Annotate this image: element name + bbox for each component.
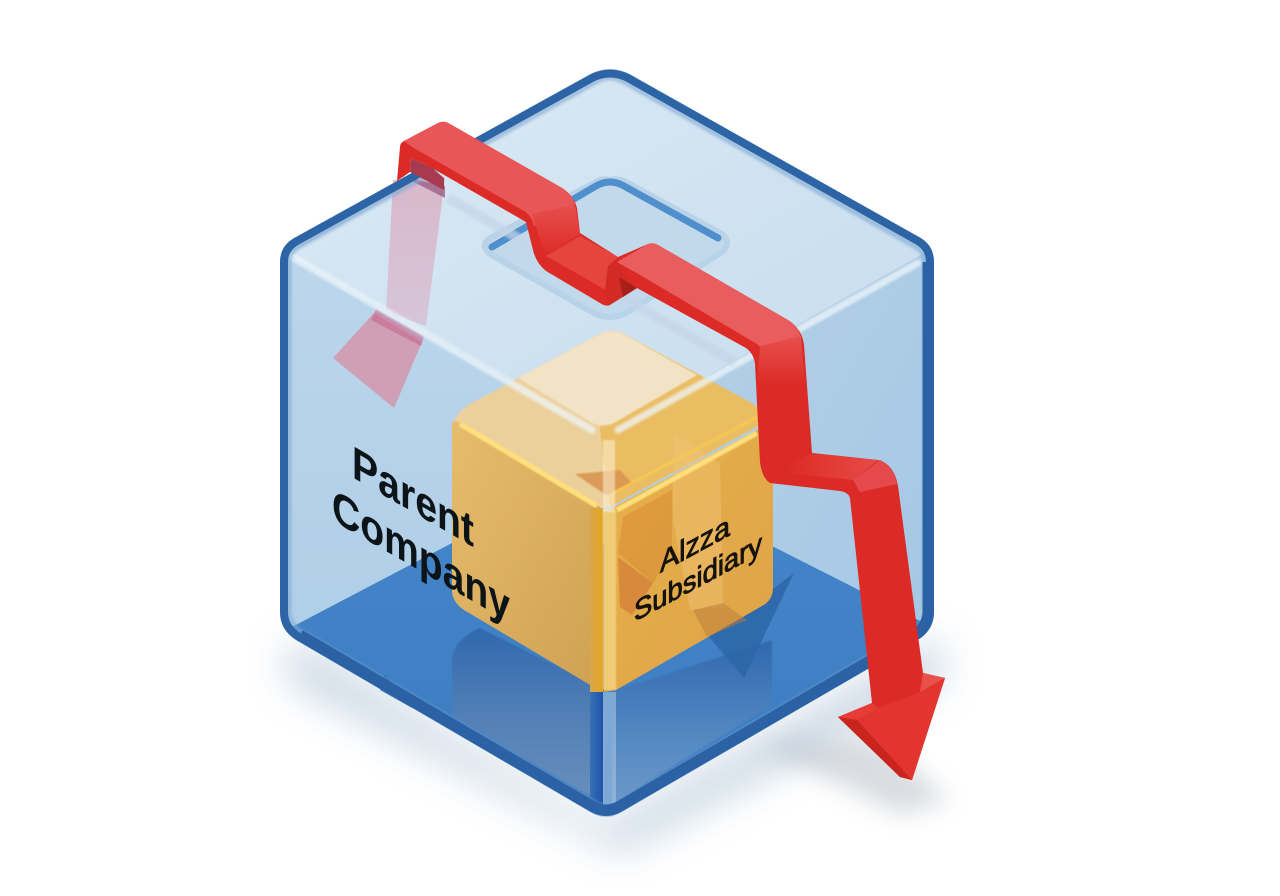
glass thick right and bottom edges xyxy=(300,262,928,810)
reflection of gold cube on floor: right xyxy=(612,640,772,804)
ground shadow xyxy=(290,640,950,850)
label: Alzza Subsidiary: Subsidiary xyxy=(634,526,762,629)
top glass face xyxy=(288,75,926,433)
glass floor xyxy=(290,543,930,814)
cube edge highlights xyxy=(460,424,757,510)
cube left face xyxy=(452,421,602,692)
glass cube: parent company xyxy=(280,69,934,817)
cube top face left half xyxy=(452,331,624,507)
translucent arrow shapes on cube right face xyxy=(618,433,747,637)
arrow head left bevel xyxy=(838,703,878,720)
glass silhouette xyxy=(280,69,934,817)
arrow ghost on floor xyxy=(709,573,794,678)
cube top face right half xyxy=(600,332,762,507)
arrow head lower bevel xyxy=(838,717,912,780)
stub shadow where the arrow meets the glass xyxy=(400,176,445,198)
arrow stepped flat face xyxy=(546,236,618,290)
arrow base silhouette xyxy=(397,122,945,780)
reflection of gold cube on floor: left xyxy=(452,628,604,804)
label: Parent Company xyxy=(332,435,510,633)
arrow upper ribbon lit face xyxy=(404,122,575,226)
cube right face xyxy=(604,427,773,692)
front vertical glass edge below cube xyxy=(590,692,616,810)
label: Parent Company: Company xyxy=(332,478,510,633)
arrow stub inner shade xyxy=(410,158,444,190)
arrow bend flat face xyxy=(775,453,878,480)
glass highlight: front right edge xyxy=(618,263,918,430)
arrow first step wall xyxy=(532,204,580,256)
small ghost arrow tip on floor xyxy=(380,674,412,708)
right glass face xyxy=(605,252,926,812)
reflected arrow ghost: lower head xyxy=(333,309,424,408)
glass highlight: front left edge xyxy=(292,257,592,430)
label: Parent Company: Parent xyxy=(352,435,474,558)
arrow vertical section shading xyxy=(757,336,805,385)
reflected arrow ghost: upper pane xyxy=(386,178,445,326)
glass outline xyxy=(284,74,930,812)
cube vertical edge highlight xyxy=(603,510,616,690)
red declining arrow xyxy=(397,122,945,780)
arrow second step wall xyxy=(605,259,637,305)
arrow head right bevel xyxy=(920,673,945,692)
glass band: inner diagonal xyxy=(448,198,735,362)
label: Alzza Subsidiary: Alzza xyxy=(660,508,730,580)
gold subsidiary cube xyxy=(452,331,773,692)
arrow head main face xyxy=(857,678,945,780)
cube top centre shadow xyxy=(575,470,633,495)
cube vertical edge amber xyxy=(590,508,603,692)
top window recess xyxy=(485,179,727,317)
arrow lower bend lit face xyxy=(853,460,897,492)
cube top washed panel xyxy=(518,331,697,426)
arrow long ribbon lit face xyxy=(617,243,801,347)
glass inner edge glow xyxy=(289,78,925,806)
